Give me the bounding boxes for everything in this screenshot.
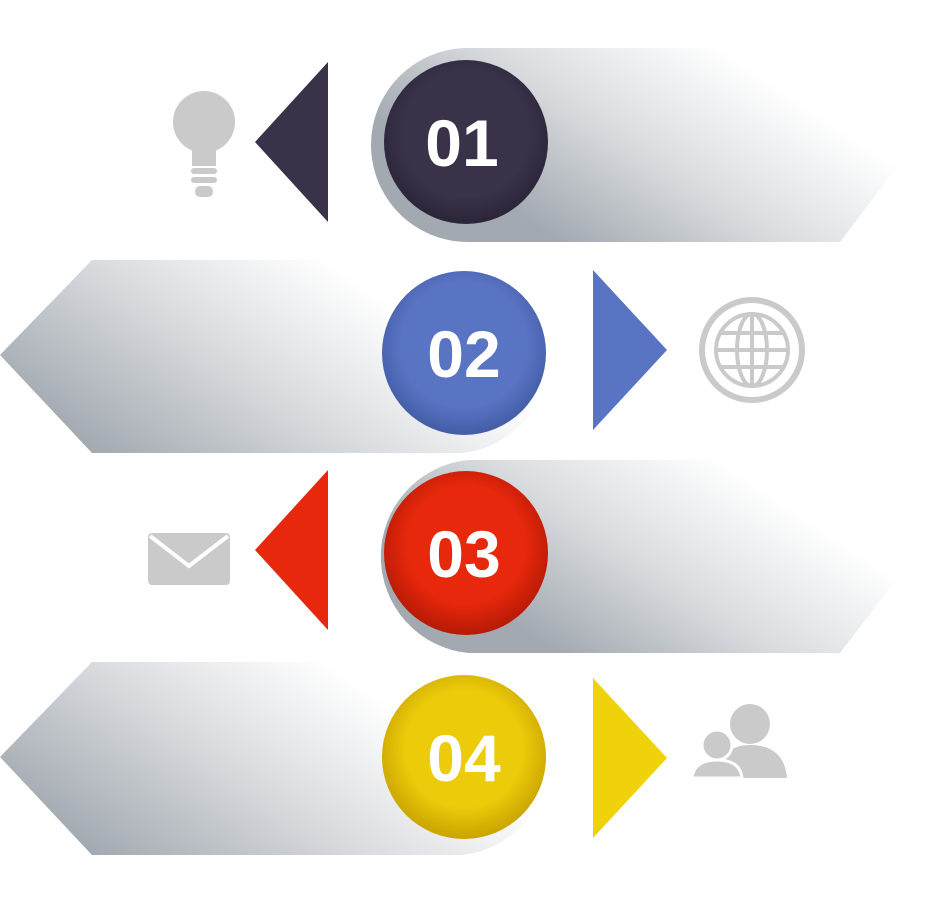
number 03: 03 [427, 517, 501, 591]
icon: light bulb [173, 91, 235, 197]
circle 4 [382, 675, 546, 839]
bar 3 [381, 460, 910, 653]
bar 1 [371, 48, 910, 242]
arrow 1 [255, 62, 328, 222]
circle 1 [384, 60, 548, 224]
bar 4 [0, 662, 549, 855]
circle 2 [382, 271, 546, 435]
step 3 [148, 460, 910, 653]
step 4 [0, 662, 787, 855]
step 1 [173, 48, 910, 242]
number 04: 04 [427, 721, 501, 795]
number 02: 02 [427, 317, 501, 391]
number 01: 01 [425, 106, 499, 180]
icon: people [692, 704, 787, 778]
arrow 3 [255, 470, 328, 630]
step 2 [0, 260, 802, 453]
arrow 4 [593, 678, 667, 838]
bar 2 [0, 260, 549, 453]
circle 3 [384, 471, 548, 635]
arrow 2 [593, 270, 667, 430]
icon: mail [148, 533, 230, 585]
icon: globe [702, 300, 802, 400]
